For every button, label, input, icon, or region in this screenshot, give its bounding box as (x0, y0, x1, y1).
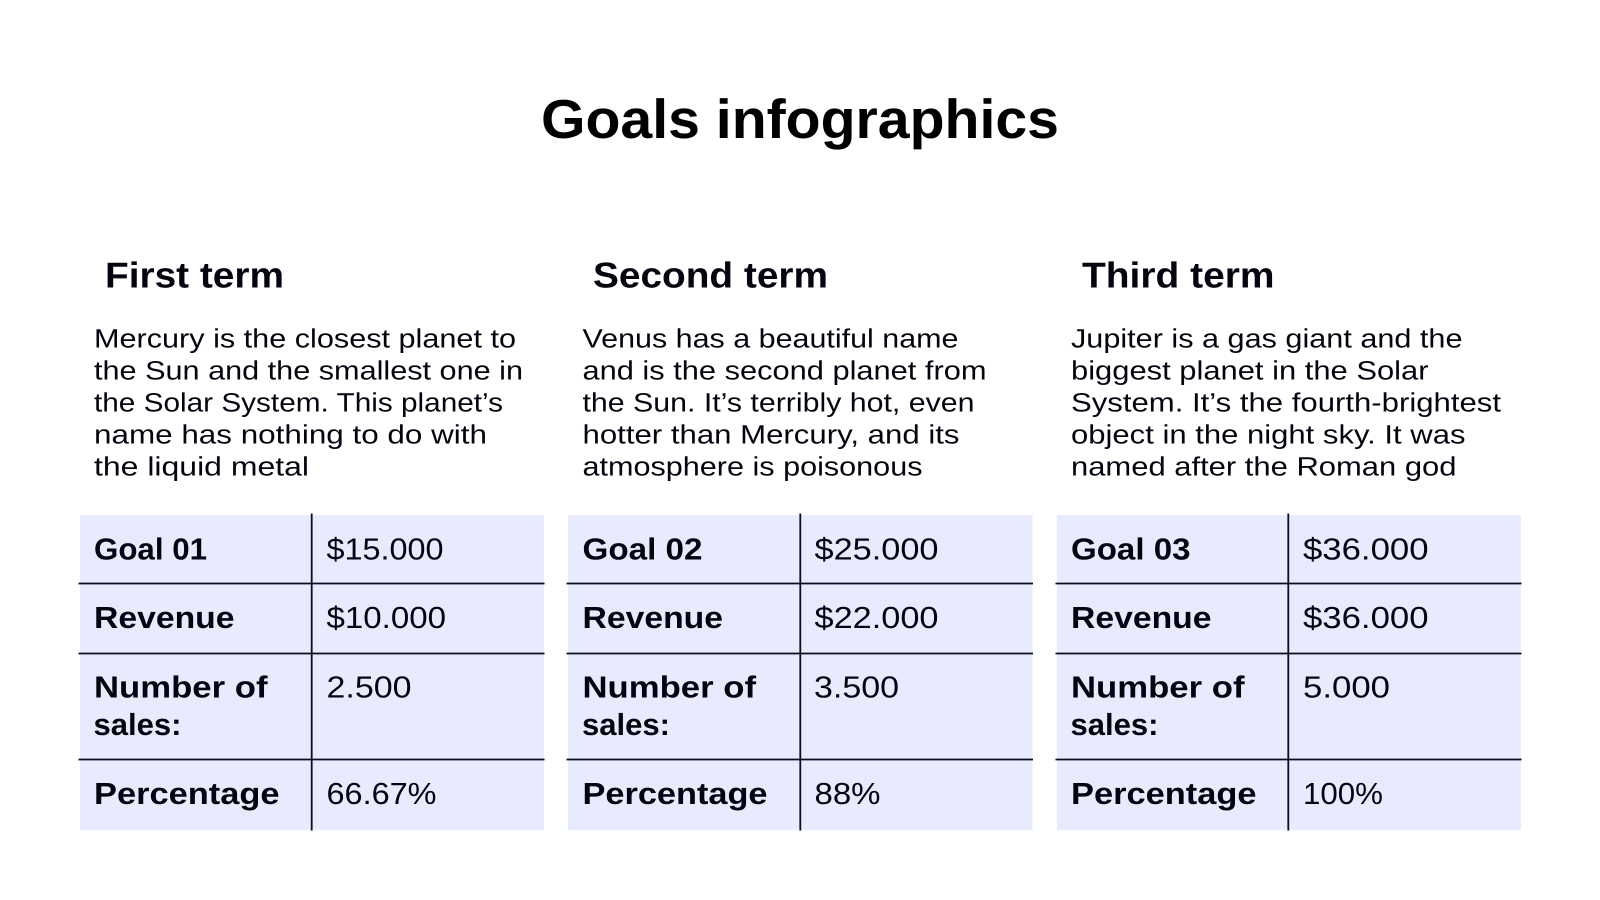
text block: third term description (1071, 324, 1502, 482)
row: goal: $15.000 (326, 532, 444, 566)
table: third term (1056, 514, 1522, 830)
row: goal (1071, 532, 1428, 566)
row: number of sales: Number of (582, 670, 757, 704)
row: percentage (94, 777, 436, 811)
panel: third term (1056, 254, 1522, 830)
row: number of sales: sales: (1070, 708, 1158, 742)
row: number of sales: sales: (94, 708, 182, 742)
text block: first term description: name has nothing to do with (94, 420, 487, 450)
text block: first term description: the Solar System. This planet’s (94, 388, 503, 418)
row: percentage (582, 777, 880, 811)
row: percentage: Percentage (1071, 777, 1256, 811)
row: number of sales (1070, 670, 1390, 742)
title: Goals infographics (541, 88, 1059, 150)
row: number of sales: Number of (94, 670, 268, 704)
heading: third term: Third term (1082, 254, 1274, 296)
row: percentage: 66.67% (326, 777, 436, 811)
heading: first term: First term (105, 254, 284, 296)
row: revenue (94, 601, 446, 635)
row: revenue: Revenue (582, 601, 723, 635)
row: percentage: Percentage (582, 777, 768, 811)
text block: third term description: named after the Roman god (1071, 452, 1456, 482)
row: goal: Goal 01 (94, 532, 207, 566)
text block: second term description: and is the second planet from (582, 356, 986, 386)
text block: second term description: hotter than Mercury, and its (582, 420, 960, 450)
row: revenue (1071, 601, 1428, 635)
text block: first term description: the liquid metal (94, 452, 309, 482)
text block: second term description: atmosphere is poisonous (582, 452, 922, 482)
row: revenue: $36.000 (1303, 601, 1428, 635)
text block: first term description: Mercury is the closest planet to (94, 324, 516, 354)
text block: first term description (94, 324, 523, 482)
row: goal: Goal 03 (1071, 532, 1190, 566)
row: revenue: $10.000 (326, 601, 446, 635)
text block: third term description: System. It’s the fourth-brightest (1071, 388, 1502, 418)
table background (1057, 515, 1521, 830)
heading: second term: Second term (593, 254, 828, 296)
row: revenue: $22.000 (814, 601, 938, 635)
row: number of sales: 3.500 (814, 670, 899, 704)
table: first term (78, 514, 544, 830)
text block: third term description: object in the night sky. It was (1071, 420, 1466, 450)
table: second term (566, 514, 1033, 830)
text block: third term description: biggest planet in the Solar (1071, 356, 1429, 386)
table background (568, 515, 1032, 830)
row: percentage: Percentage (94, 777, 280, 811)
row: goal (582, 532, 938, 566)
row: number of sales (582, 670, 899, 742)
text block: second term description (582, 324, 986, 482)
table background (80, 515, 544, 830)
row: number of sales: Number of (1071, 670, 1245, 704)
row: revenue: Revenue (1071, 601, 1212, 635)
text block: third term description: Jupiter is a gas giant and the (1071, 324, 1462, 354)
row: percentage: 100% (1303, 777, 1383, 811)
row: revenue (582, 601, 938, 635)
row: goal: Goal 02 (582, 532, 702, 566)
panel: second term (566, 254, 1033, 830)
text block: second term description: the Sun. It’s terribly hot, even (582, 388, 974, 418)
row: revenue: Revenue (94, 601, 234, 635)
row: number of sales: 5.000 (1303, 670, 1390, 704)
panel: first term (78, 254, 544, 830)
row: goal: $25.000 (814, 532, 938, 566)
row: goal (94, 532, 444, 566)
row: goal: $36.000 (1303, 532, 1428, 566)
text block: second term description: Venus has a beautiful name (582, 324, 958, 354)
text block: first term description: the Sun and the smallest one in (94, 356, 523, 386)
row: percentage (1071, 777, 1383, 811)
row: number of sales (94, 670, 412, 742)
row: number of sales: 2.500 (326, 670, 412, 704)
row: percentage: 88% (814, 777, 880, 811)
row: number of sales: sales: (582, 708, 670, 742)
